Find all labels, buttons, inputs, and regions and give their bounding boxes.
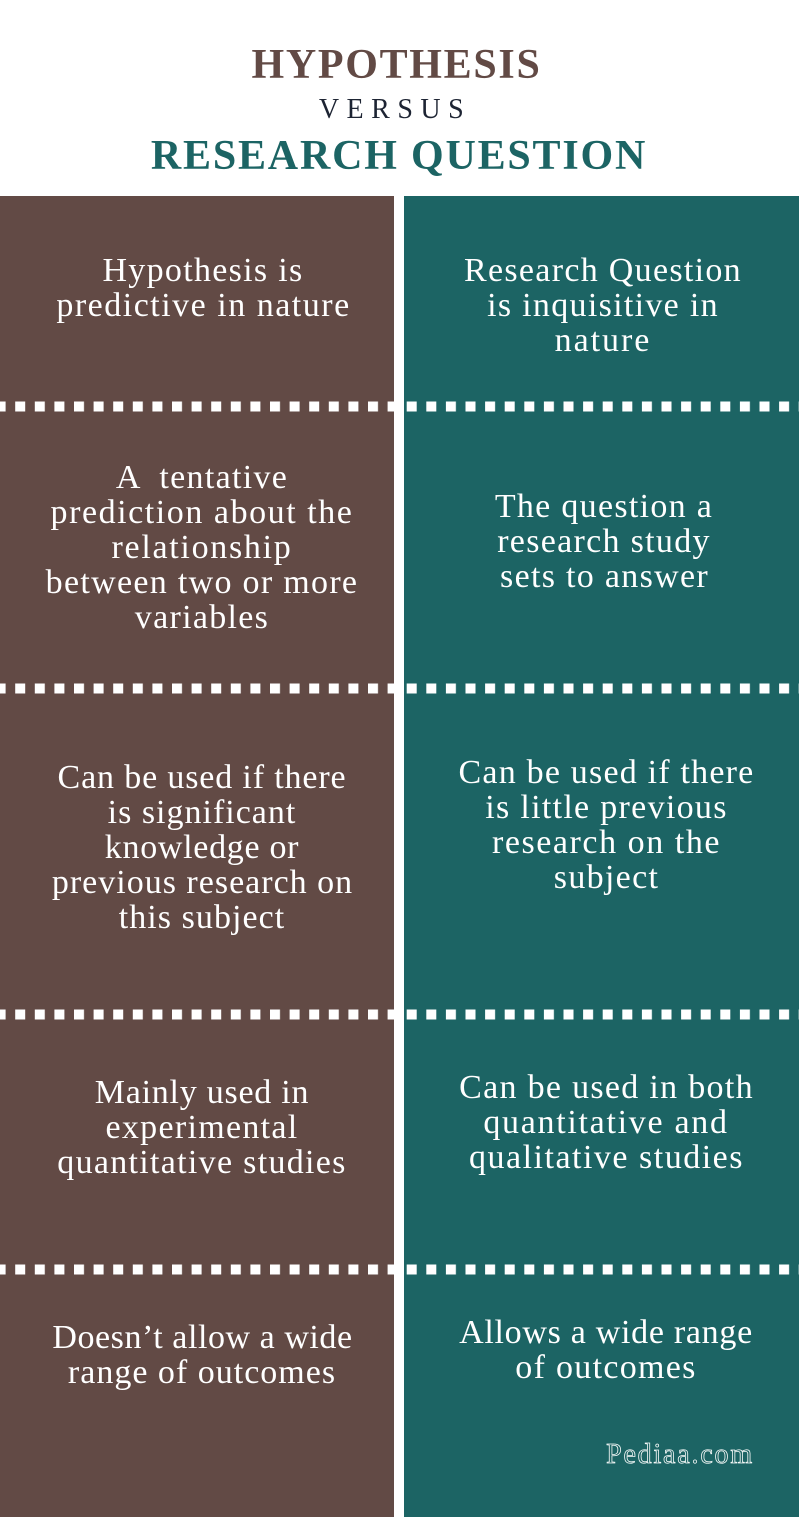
text: research question row 2: research study (497, 523, 711, 560)
text: hypothesis row 4: quantitative studies (57, 1144, 347, 1181)
panel: hypothesis column (0, 196, 394, 1517)
heading: research question: RESEARCH QUESTION (151, 133, 647, 179)
dotted dividers (0, 402, 799, 1274)
text: hypothesis row 3: this subject (119, 899, 285, 936)
text: hypothesis row 1: Hypothesis is (102, 252, 304, 289)
text: research question row 2: sets to answer (500, 558, 709, 595)
text: research question row 3: subject (554, 859, 659, 896)
text: research question row 4: qualitative studies (469, 1139, 744, 1176)
text: research question row 3: is little previous (485, 789, 728, 826)
text: research question row 4: quantitative and (483, 1104, 729, 1141)
text: hypothesis row 2: between two or more (46, 564, 358, 601)
text: hypothesis row 3: knowledge or (105, 829, 299, 866)
text: research question row 5: Allows a wide range (459, 1314, 753, 1351)
text: hypothesis row 4: Mainly used in (95, 1074, 309, 1111)
panel: research question column (404, 196, 799, 1517)
text: research question row 3: research on the (492, 824, 721, 861)
logo: Pediaa.com: Pediaa.com (606, 1439, 754, 1470)
text: hypothesis row 2: relationship (112, 529, 292, 566)
text: research question row 2: The question a (495, 488, 713, 525)
heading: hypothesis: HYPOTHESIS (251, 42, 542, 88)
text: hypothesis row 5: range of outcomes (68, 1354, 336, 1391)
text: hypothesis row 4: experimental (105, 1109, 299, 1146)
text: hypothesis row 2: variables (135, 599, 269, 636)
heading: versus: VERSUS (319, 94, 471, 125)
text: hypothesis row 2: A tentative (116, 459, 288, 496)
text: research question row 1: Research Question (464, 252, 742, 289)
text: hypothesis row 2: prediction about the (51, 494, 353, 531)
text: hypothesis row 3: previous research on (52, 864, 353, 901)
text: research question row 1: nature (555, 322, 651, 359)
title (151, 42, 647, 179)
text: research question row 3: Can be used if there (459, 754, 754, 791)
text: research question row 1: is inquisitive in (487, 287, 719, 324)
text: hypothesis row 3: Can be used if there (58, 759, 346, 796)
text: hypothesis row 3: is significant (108, 794, 296, 831)
text: hypothesis row 5: Doesn’t allow a wide (52, 1319, 353, 1356)
text: hypothesis row 1: predictive in nature (56, 287, 351, 324)
text: research question row 4: Can be used in both (459, 1069, 754, 1106)
text: research question row 5: of outcomes (515, 1349, 697, 1386)
